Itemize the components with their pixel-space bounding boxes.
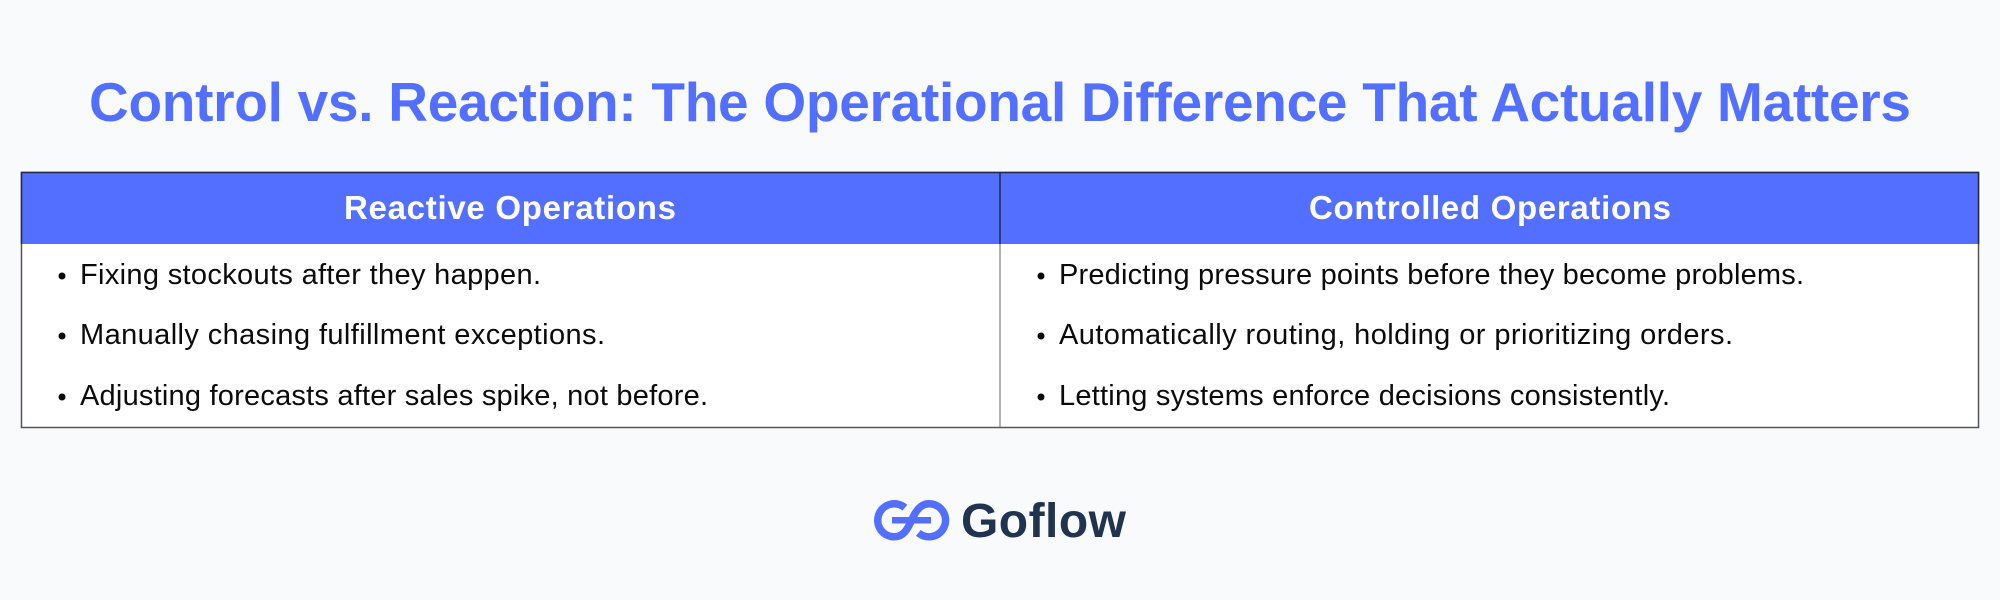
title: Control vs. Reaction: The Operational Difference That Actually Matters <box>89 71 1911 133</box>
controlled operations list: Predicting pressure points before they become problems. <box>1059 259 1804 291</box>
controlled operations list: Automatically routing, holding or prioritizing orders. <box>1059 319 1733 351</box>
panel: reactive operations header: Reactive Operations <box>344 189 676 226</box>
reactive operations list: Adjusting forecasts after sales spike, not before. <box>80 380 708 412</box>
panel: reactive operations header <box>21 172 1000 244</box>
icon: infinity G mark <box>878 504 946 537</box>
reactive operations list: Fixing stockouts after they happen. <box>80 259 541 291</box>
comparison table <box>21 172 1978 428</box>
panel: controlled operations header <box>1000 172 1978 244</box>
column divider <box>999 244 1001 427</box>
panel: controlled operations header: Controlled Operations <box>1309 189 1671 226</box>
reactive operations list: Manually chasing fulfillment exceptions. <box>80 319 605 351</box>
reactive operations list <box>58 259 708 412</box>
panel: table body <box>22 172 1978 428</box>
controlled operations list <box>1038 259 1804 412</box>
wordmark: Goflow <box>961 495 1127 548</box>
table outline <box>22 172 1978 244</box>
controlled operations list: Letting systems enforce decisions consistently. <box>1059 380 1670 412</box>
logo: Goflow <box>878 495 1127 548</box>
